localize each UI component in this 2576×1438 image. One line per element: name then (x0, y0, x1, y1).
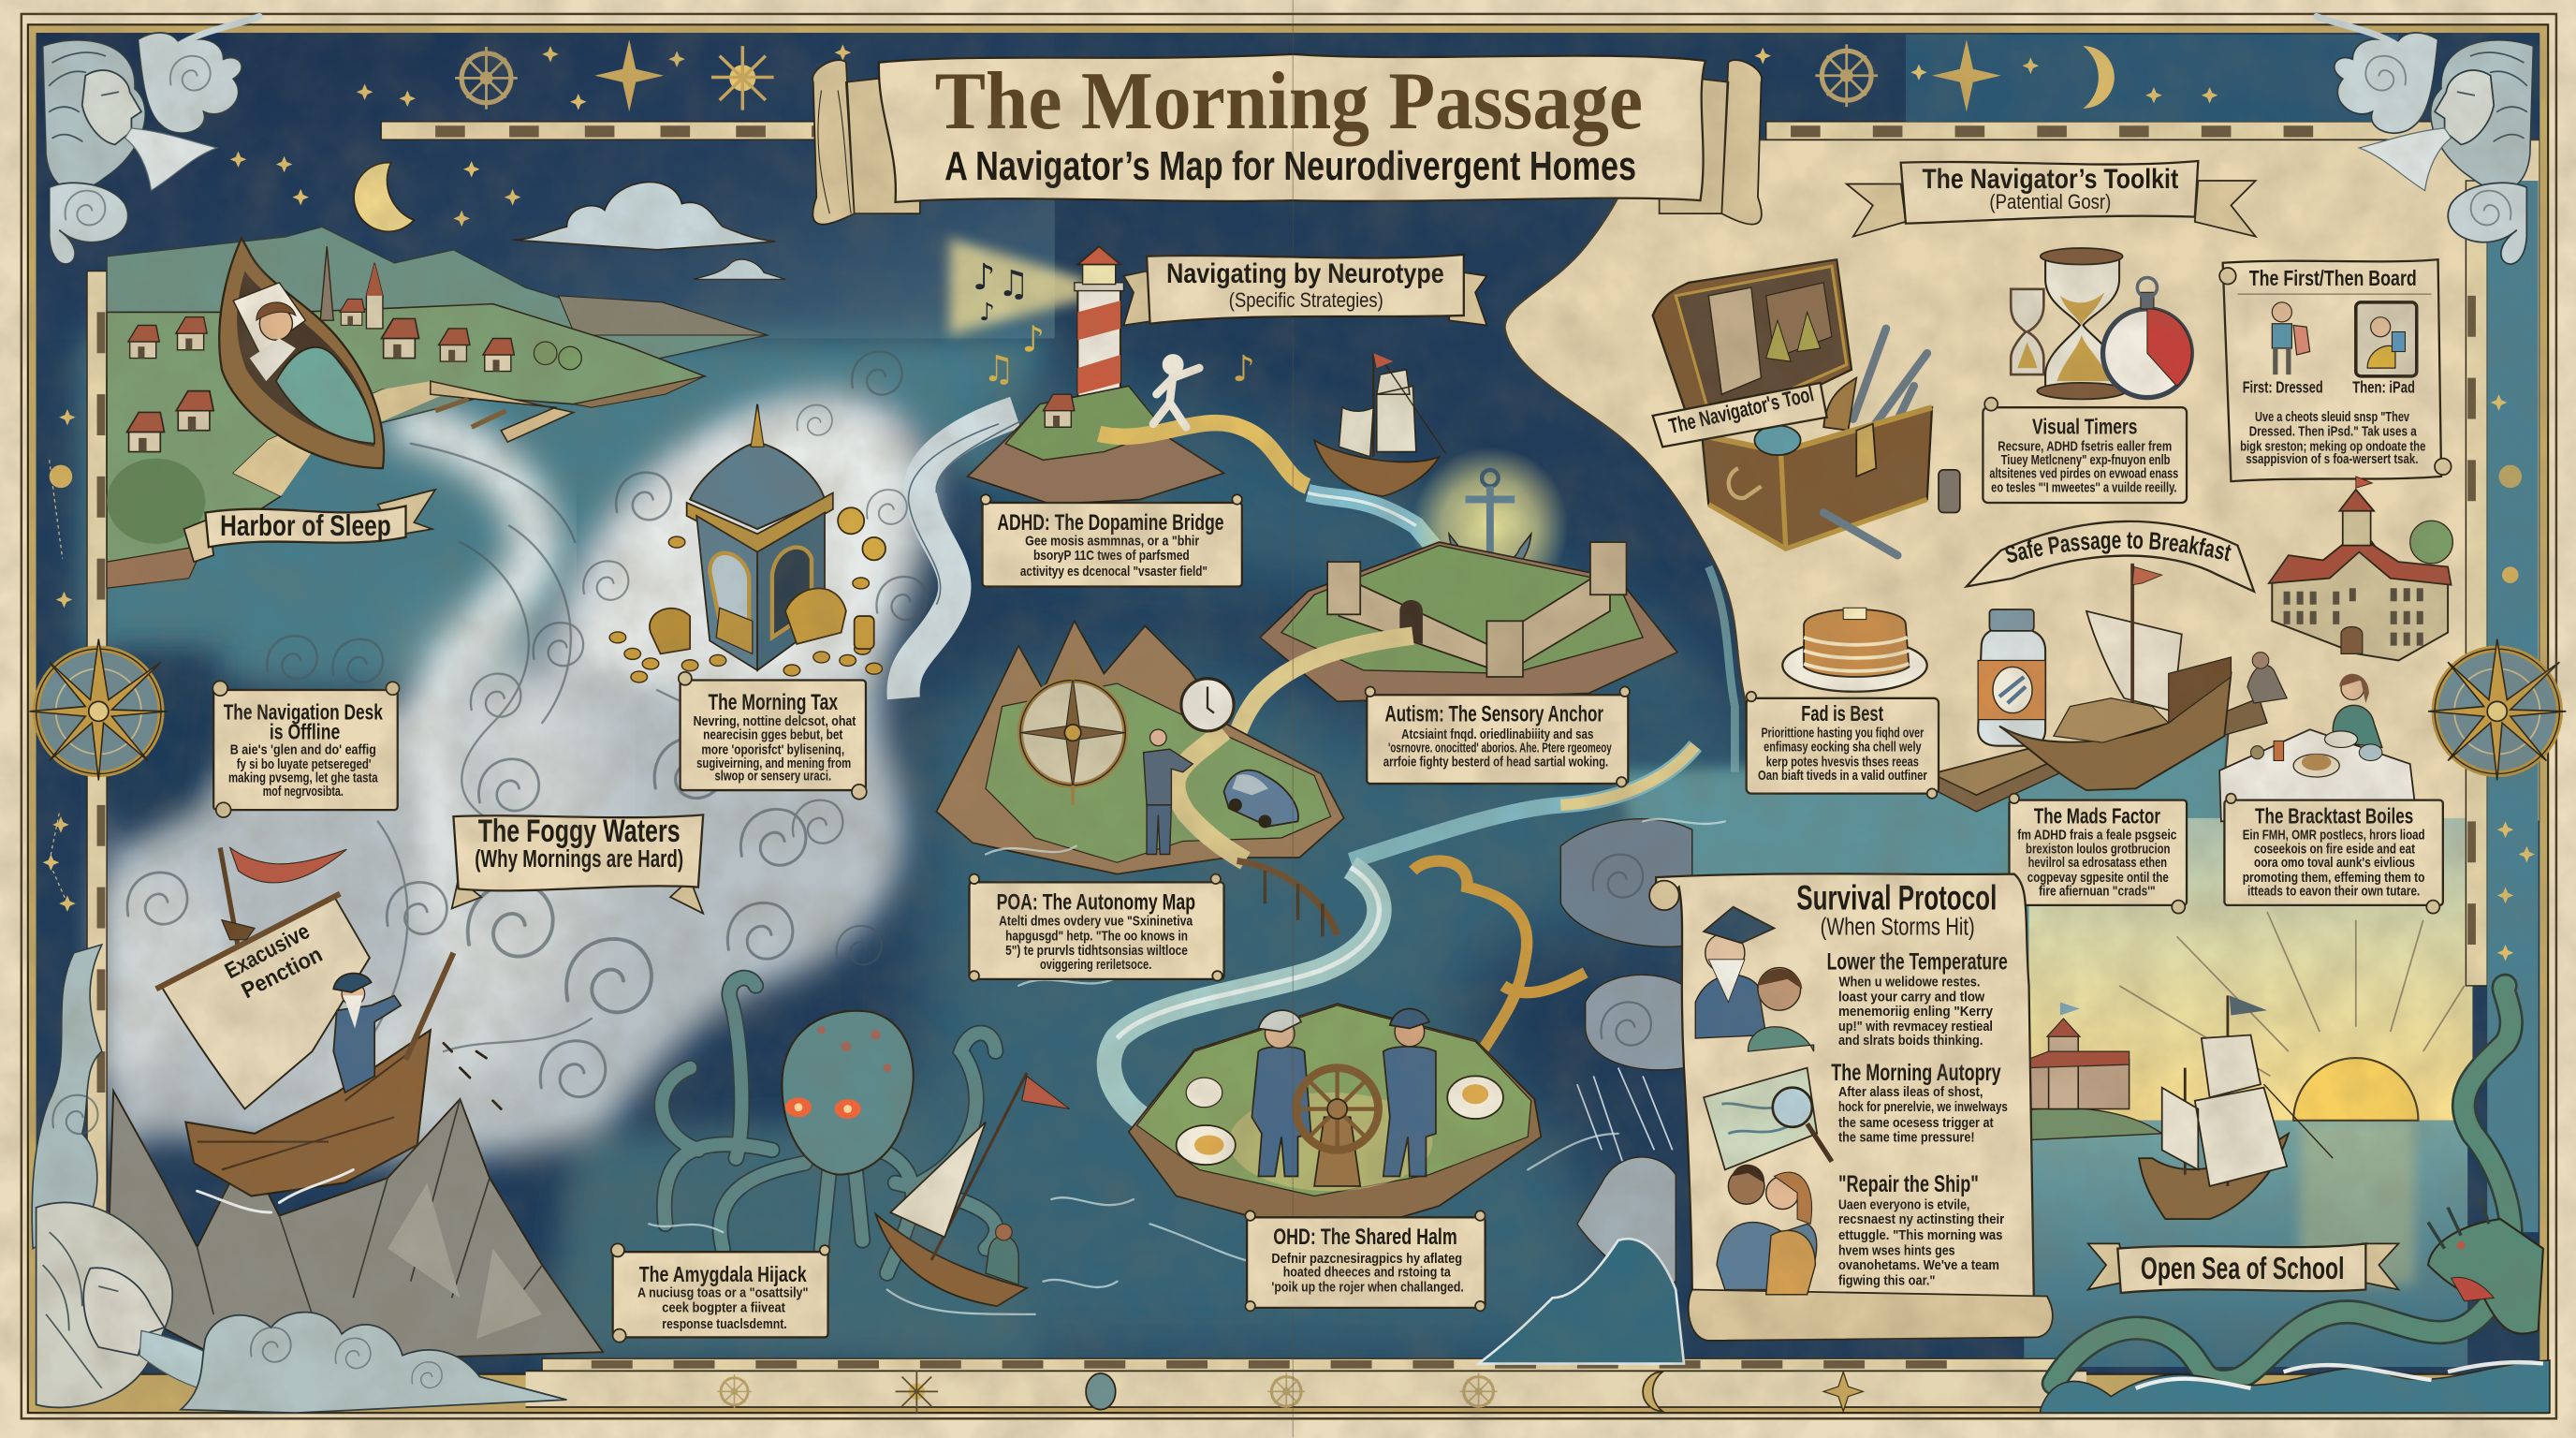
island: sensory anchor castle (1260, 542, 1677, 701)
banner: the navigator's toolkit: The Navigator’s Toolkit (1922, 164, 2178, 195)
waves bottom left (181, 1313, 567, 1413)
banner: the foggy waters: (Why Mornings are Hard) (475, 844, 683, 873)
icon: first dressed (2272, 302, 2310, 374)
panel: morning tax: slwop or sensery uraci. (714, 769, 831, 785)
icon: glowing anchor (1412, 447, 1569, 605)
bottom border ornaments (717, 1371, 1863, 1413)
island: autonomy map (936, 621, 1344, 874)
label: sail text: Exacusive (221, 919, 314, 984)
music notes: ♫ (997, 263, 1030, 305)
music notes: ♪ (1022, 319, 1045, 361)
panel: autism sensory anchor: arrfoie fighty besterd of head sartial woking. (1383, 754, 1608, 770)
sea dragon (2054, 986, 2543, 1384)
moon and stars over the harbor (230, 151, 520, 231)
panel: survival protocol scroll: When u welidowe restes. (1838, 975, 1980, 990)
panel: visual timers: Recsure, ADHD fsetris ealler frem (1998, 438, 2172, 454)
fog swirls (127, 352, 927, 1097)
title: The Morning Passage (935, 55, 1643, 146)
panel: survival protocol scroll: figwing this oar." (1838, 1272, 1936, 1288)
icon: ship's helm wheel (1293, 1064, 1382, 1186)
pirate ship: executive function (156, 847, 453, 1196)
sky: sunrise (2029, 818, 2472, 1121)
panel: survival protocol scroll: Survival Protocol (1796, 878, 1997, 917)
dancing figure (1153, 359, 1199, 427)
panel: adhd dopamine bridge (981, 494, 1242, 586)
panel: first/then board: First: Dressed (2243, 377, 2323, 396)
officers at the helm (1251, 1008, 1436, 1176)
banner: the foggy waters: The Foggy Waters (478, 814, 681, 849)
panel: bracktast boiles: promoting them, effeming them to (2243, 870, 2425, 886)
panel: navigation desk: mof negrvosibta. (263, 784, 344, 800)
foam and swell at the ship (198, 1043, 501, 1212)
panel: mads factor: fm ADHD frais a feale psgseic (2017, 827, 2177, 843)
tools (1853, 329, 1927, 431)
kiosk: the morning tax (687, 404, 833, 670)
icon: pancakes (1782, 608, 1927, 692)
pirate ship: executive function: Penction (238, 943, 327, 1004)
panel: survival protocol scroll: After alass ileas of shost, (1838, 1084, 1983, 1100)
icon: supplement bottle (1978, 609, 2045, 746)
icon: then ipad (2356, 302, 2417, 376)
icon: compass on the island (1020, 660, 1125, 805)
small sailboat (875, 1073, 1070, 1306)
panel: autism sensory anchor: 'osrnovre. onocitted' aborios. Ahe. Ptere rgeomeoy (1388, 740, 1612, 756)
icon: blue car (1224, 770, 1298, 828)
panel: fad is best: Fad is Best (1801, 701, 1883, 726)
panel: survival protocol scroll: the same time pressure! (1838, 1130, 1975, 1146)
panel: amygdala hijack (611, 1243, 829, 1343)
panel: fad is best: kerp potes hvesvis thses reeas (1766, 754, 1919, 770)
panel: poa autonomy map (970, 874, 1224, 981)
panel: fad is best (1747, 692, 1939, 799)
icon: map and magnifier (1704, 1068, 1832, 1169)
icon: clock on the island (1181, 679, 1234, 731)
panel: amygdala hijack: A nuciusg toas or a "osattsily" (637, 1284, 809, 1300)
panel: morning tax (679, 672, 867, 800)
panel: morning tax: The Morning Tax (708, 691, 838, 715)
panel: ohd shared helm: 'poik up the rojer when challanged. (1271, 1279, 1464, 1295)
icon: captain and child (1695, 907, 1814, 1051)
panel: visual timers: Visual Timers (2032, 414, 2137, 438)
panel: survival protocol scroll: Lower the Temperature (1827, 949, 2008, 975)
panel: autism sensory anchor (1365, 687, 1630, 787)
panel: mads factor: fire afiernuan "crads'" (2039, 883, 2156, 899)
panel: survival protocol scroll: loast your carry and tlow (1838, 989, 1984, 1005)
panel: navigation desk: making pvsemg, let ghe tasta (228, 770, 378, 785)
banner: the foggy waters (452, 814, 703, 914)
panel: amygdala hijack: ceek bogpter a fiiveat (662, 1300, 785, 1316)
land: parchment continent (1505, 139, 2539, 821)
banner: harbor of sleep: Harbor of Sleep (220, 508, 391, 542)
panel: morning tax: more 'oporisfct' byliseninq, (701, 741, 844, 757)
wind face: top left (43, 17, 259, 264)
panel: ohd shared helm: Defnir pazcnesiragpics hy aflateg (1271, 1251, 1462, 1267)
banner: navigating by neurotype: (Specific Strategies) (1229, 288, 1383, 312)
panel: first/then board (2219, 259, 2452, 481)
sea: Fad strait (1616, 735, 2228, 966)
panel: survival protocol scroll: recsnaest ny actinsting their (1838, 1211, 2004, 1227)
panel: survival protocol scroll: hvem wses hints ges (1838, 1242, 1955, 1258)
island: dopamine bridge (968, 386, 1454, 579)
panel: visual timers: Tiuey Metlcneny" exp-fnuyon enlb (2001, 452, 2170, 468)
panel: mads factor: cogpevay sgpesite ontil the (2027, 870, 2169, 886)
panel: first/then board: The First/Then Board (2249, 266, 2417, 290)
panel: mads factor: hevilrol sa edrosatass ethen (2028, 855, 2167, 871)
panel: navigation desk: B aie's 'glen and do' eaffig (230, 741, 376, 757)
rocks (107, 1091, 603, 1364)
panel: survival protocol scroll (1649, 873, 2053, 1341)
panel: survival protocol scroll: and slrats boids thinking. (1838, 1033, 1983, 1049)
panel: bracktast boiles (2224, 794, 2443, 914)
banner: open sea of school (2088, 1243, 2398, 1293)
panel: survival protocol scroll: up!" with revmacey restieal (1838, 1019, 1993, 1034)
panel: fad is best: Oan biaft tiveds in a valid outfiner (1758, 768, 1927, 784)
icon: parents embrace (1717, 1165, 1817, 1295)
panel: first/then board: Dressed. Then iPsd." Tak uses a (2249, 424, 2417, 440)
panel: amygdala hijack: The Amygdala Hijack (639, 1262, 807, 1286)
icon: boat with sleeping child (219, 238, 384, 468)
beam and lighthouse (949, 238, 1123, 411)
music notes: ♫ (983, 348, 1015, 390)
panel: morning tax: sugiveirning, and mening from (696, 756, 851, 771)
banner: the navigator's toolkit: (Patential Gosr) (1989, 190, 2111, 213)
island: shared helm (1129, 1004, 1541, 1232)
panel: navigation desk (212, 681, 399, 817)
icon: stopwatch (2103, 278, 2191, 398)
banner: open sea of school: Open Sea of School (2141, 1252, 2345, 1286)
fog bank (107, 389, 936, 1156)
panel: adhd dopamine bridge: ADHD: The Dopamine Bridge (997, 511, 1224, 536)
banner: the navigator's tool (1653, 381, 1827, 447)
panel: ohd shared helm: OHD: The Shared Halm (1273, 1225, 1457, 1250)
dock (431, 381, 574, 442)
panel: ohd shared helm: hoated dheeces and rstoing ta (1283, 1265, 1451, 1281)
banner: the navigator's toolkit (1847, 161, 2256, 237)
panel: survival protocol scroll: (When Storms Hit) (1821, 912, 1975, 940)
panel: visual timers: altsitenes ved pirdes on evwoad enass (1989, 466, 2178, 482)
harbor of sleep: land (107, 227, 768, 588)
panel: autism sensory anchor: Autism: The Sensory Anchor (1385, 702, 1603, 726)
icon: toolbox chest (1653, 259, 1960, 555)
panel: mads factor (2009, 794, 2187, 914)
ship sailing to school (2139, 995, 2333, 1219)
panel: survival protocol scroll: ovanohetams. We've a team (1838, 1257, 1999, 1273)
bridge and river (1109, 746, 1695, 1117)
panel: navigation desk: fy si bo luyate petsereged' (237, 756, 372, 772)
banner: navigating by neurotype: Navigating by Neurotype (1166, 258, 1444, 289)
banner: harbor of sleep (184, 490, 435, 562)
panel: survival protocol scroll: the same ocesess trigger at (1838, 1115, 1994, 1131)
panel: survival protocol scroll: hock for pnerelvie, we inwelways (1838, 1099, 2008, 1115)
banner: the navigator's tool: The Navigator's Tool (1666, 381, 1816, 438)
music notes: ♪ (973, 257, 996, 299)
subtitle: A Navigator’s Map for Neurodivergent Homes (944, 143, 1636, 189)
panel: visual timers (1983, 398, 2187, 503)
panel: navigation desk: is Offline (270, 720, 340, 744)
panel: mads factor: brexiston loulos grotbrucion (2026, 841, 2170, 857)
kraken (662, 978, 996, 1273)
panel: first/then board: Then: iPad (2352, 377, 2415, 396)
panel: morning tax: nearecisin gges bebut, bet (703, 727, 842, 743)
sea swell lines (649, 723, 1725, 1314)
panel: first/then board: ssappisvion of s foa-wersert tsak. (2246, 451, 2419, 467)
banner: safe passage to breakfast: Safe Passage to Breakfast (2005, 532, 2232, 563)
clouds over the harbor (513, 183, 785, 279)
music notes: ♪ (979, 299, 995, 327)
wind face: bottom left (37, 1202, 279, 1407)
panel: navigation desk: The Navigation Desk (224, 700, 383, 725)
sun and rays (2119, 912, 2465, 1121)
panel: survival protocol scroll: menemoriig enling "Kerry (1838, 1004, 1993, 1020)
panel: first/then board: bigk sreston; meking op ondoate the (2240, 438, 2425, 454)
panel: bracktast boiles: coseekois on fire eside and eat (2254, 841, 2415, 857)
panel: first/then board: Uve a cheots sleuid snsp "Thev (2255, 409, 2409, 425)
panel: mads factor: The Mads Factor (2034, 804, 2160, 829)
panel: fad is best: enfimasy eocking sha chell wely (1764, 739, 1922, 755)
panel: autism sensory anchor: Atcsiaint fnqd. oriedlinabiiity and sas (1401, 726, 1593, 742)
panel: bracktast boiles: itteads to eavon their own tutare. (2247, 883, 2420, 899)
houses (128, 325, 159, 359)
figure: parent at the map (1144, 729, 1193, 855)
panel: survival protocol scroll: The Morning Autopry (1831, 1061, 2001, 1086)
waves bottom right (2041, 1360, 2550, 1413)
icon: hourglasses (2011, 248, 2126, 399)
panel: survival protocol scroll: ettuggle. "This morning was (1838, 1227, 2002, 1243)
compass roses on the border (30, 639, 2566, 781)
music notes: ♪ (1232, 348, 1255, 390)
sky: night over harbor (37, 33, 1055, 338)
harbor land (107, 304, 705, 586)
panel: bracktast boiles: Ein FMH, OMR postlecs, hrors lioad (2243, 827, 2425, 843)
dock and cargo ship (1932, 564, 2267, 812)
path between islands (1179, 636, 1412, 858)
panel: poa autonomy map: hapgusgd" hetp. "The oo knows in (1005, 929, 1188, 945)
banner: navigating by neurotype (1123, 255, 1486, 325)
left border ornaments (43, 409, 76, 912)
panel: amygdala hijack: response tuaclsdemnt. (662, 1316, 787, 1332)
panel: poa autonomy map: Atelti dmes ovdery vue "Sxininetiva (999, 913, 1193, 929)
panel: adhd dopamine bridge: bsoryP 11C twes of parfsmed (1033, 548, 1190, 564)
coins around the kiosk (609, 507, 886, 682)
panel: adhd dopamine bridge: Gee mosis asmmnas, or a "bhir (1025, 534, 1199, 550)
sea: open sea of school (2024, 1121, 2467, 1367)
title banner scroll (812, 0, 1762, 1437)
panel: bracktast boiles: oora omo toval aunk's eivlious (2254, 855, 2415, 871)
panel: poa autonomy map: oviggering reriletsoce. (1040, 957, 1151, 973)
panel: poa autonomy map: POA: The Autonomy Map (997, 890, 1195, 915)
panel: poa autonomy map: 5") te prurvls tidhtsonsias wiltloce (1005, 943, 1188, 959)
sailing ship at the bridge (1314, 353, 1445, 496)
panel: morning tax: Nevring, nottine delcsot, ohat (694, 713, 856, 729)
panel: visual timers: eo tesles "'I mweetes'' a vuilde reeilly. (1991, 479, 2177, 495)
captain (333, 974, 401, 1093)
hills (107, 227, 768, 492)
music notes (973, 257, 1255, 390)
banner: safe passage to breakfast (1964, 521, 2256, 594)
castle on the shore (2024, 1002, 2162, 1140)
panel: fad is best: Priorittione hasting you fiqhd over (1761, 726, 1924, 741)
right border ornaments (2491, 394, 2535, 961)
icon: school building (2269, 477, 2452, 660)
golden kelp and storm clouds (1412, 819, 1692, 1364)
sea: harbor waters (82, 335, 1051, 690)
figures and breakfast table (2219, 653, 2415, 821)
wind face: top right (2317, 17, 2533, 264)
wave flourish: left (32, 945, 102, 1249)
panel: survival protocol scroll: "Repair the Ship" (1838, 1172, 1979, 1197)
panel: bracktast boiles: The Bracktast Boiles (2255, 804, 2413, 829)
panel: adhd dopamine bridge: activityy es dcenocal "vsaster field" (1020, 564, 1208, 580)
panel: survival protocol scroll: Uaen everyono is etvile, (1838, 1196, 1969, 1212)
panel: ohd shared helm (1245, 1211, 1486, 1311)
top border ornaments (357, 39, 2217, 111)
